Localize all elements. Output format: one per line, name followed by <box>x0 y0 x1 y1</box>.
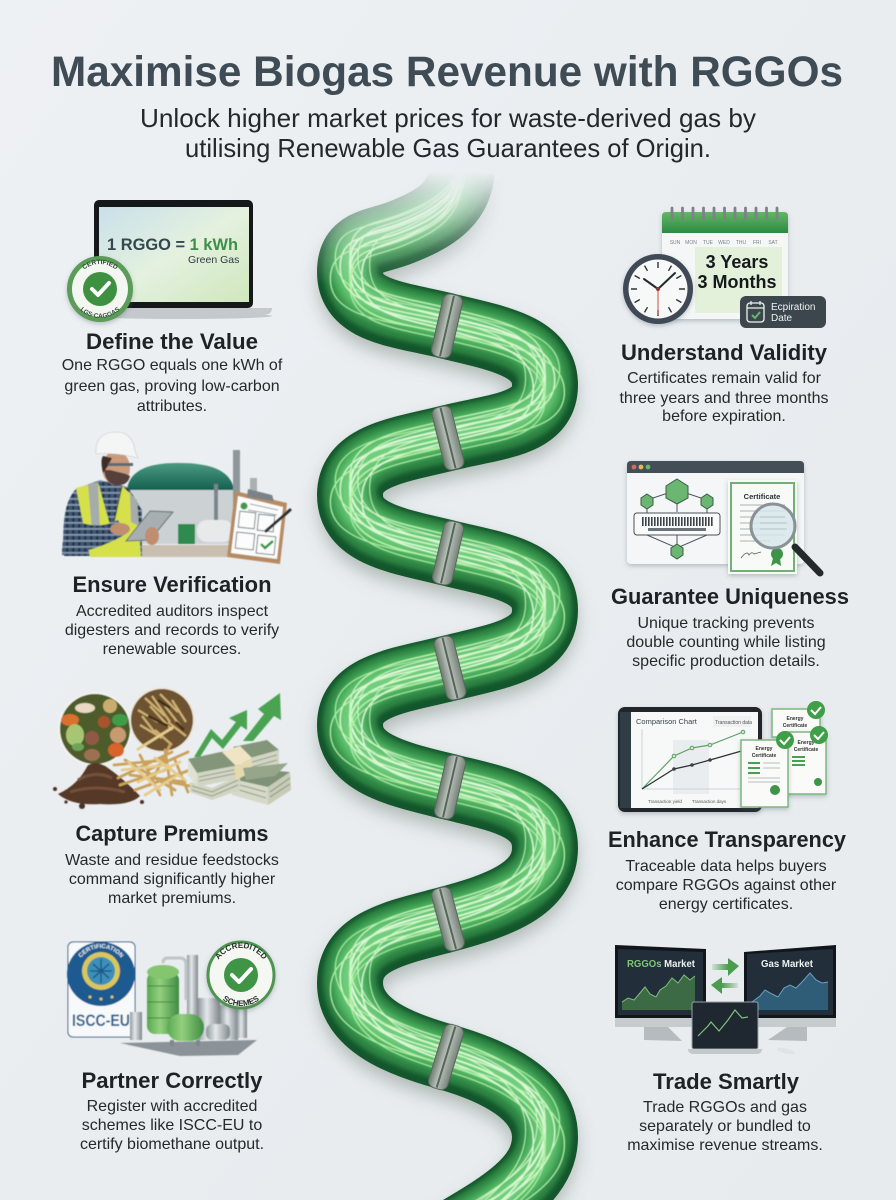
tablet comparison chart: Transaction yield <box>648 799 682 804</box>
text: capture premiums description <box>65 852 279 907</box>
certificate stack: Energy <box>798 740 815 746</box>
icon: certified badge: LGS·CAGGAS <box>80 306 120 318</box>
calendar: MON <box>685 240 697 246</box>
calendar: WED <box>718 240 730 246</box>
icon: market monitors with exchange arrows <box>615 945 836 1056</box>
straw pile <box>114 728 190 795</box>
text: ensure verification description: renewable sources. <box>103 641 241 658</box>
heading: Guarantee Uniqueness: Guarantee Uniqueness <box>611 584 849 609</box>
text: enhance transparency description: compare RGGOs against other <box>616 877 837 894</box>
text: define the value description: attributes. <box>137 398 207 415</box>
pipe clamp ring 5 <box>433 754 467 820</box>
icon: calendar with clock and expiration tag <box>623 208 826 328</box>
text: capture premiums description: Waste and residue feedstocks <box>65 852 279 869</box>
icon: inspector with digester and clipboard <box>62 432 290 564</box>
wall clock <box>623 254 693 324</box>
certificate stack: Certificate <box>752 753 776 759</box>
pipe clamp ring 1 <box>430 293 464 359</box>
text: capture premiums description: market premiums. <box>108 890 236 907</box>
text: understand validity description: before expiration. <box>662 408 786 425</box>
accredited schemes seal: SCHEMES <box>223 996 259 1006</box>
text: capture premiums description: command significantly higher <box>69 871 276 888</box>
tracking window <box>627 461 804 564</box>
rising green arrows <box>194 693 281 757</box>
calendar: TUE <box>703 240 714 246</box>
heading: Partner Correctly: Partner Correctly <box>82 1068 263 1093</box>
calendar: 3 Months <box>698 272 776 292</box>
gas market monitor: Gas Market <box>761 959 814 970</box>
text: enhance transparency description: Traceable data helps buyers <box>625 858 827 875</box>
ISCC-EU badge: ISCC-EU <box>72 1012 130 1030</box>
text: trade smartly description <box>627 1099 823 1154</box>
soil pile <box>53 763 144 809</box>
inspector figure <box>62 432 173 557</box>
text: partner correctly description: certify biomethane output. <box>80 1136 264 1153</box>
icon: ISCC-EU badge, plant and accredited seal <box>66 940 278 1056</box>
title: Maximise Biogas Revenue with RGGOs <box>51 48 843 96</box>
accredited schemes seal <box>204 940 278 1014</box>
pipe clamp ring 6 <box>430 886 466 952</box>
gas market monitor <box>744 945 836 1041</box>
icon: comparison chart tablet and certificates <box>618 701 828 812</box>
digester tank <box>120 450 257 557</box>
icon: laptop showing 1 RGGO = 1 kWh <box>64 200 272 326</box>
heading: Trade Smartly: Trade Smartly <box>653 1069 800 1094</box>
RGGOs market monitor <box>615 945 706 1041</box>
tablet comparison chart <box>618 707 762 812</box>
calendar: SAT <box>768 240 778 246</box>
text: enhance transparency description <box>616 858 837 913</box>
icon: feedstocks and cash with rising arrows <box>53 687 291 809</box>
clipboard checklist <box>227 489 290 564</box>
text: partner correctly description: schemes like ISCC-EU to <box>82 1117 262 1134</box>
pipe clamp ring 7 <box>427 1023 465 1091</box>
pipe clamp ring 2 <box>431 405 465 471</box>
subtitle: utilising Renewable Gas Guarantees of Origin. <box>185 133 711 163</box>
laptop chart <box>688 1002 795 1056</box>
calendar: FRI <box>753 240 761 246</box>
calendar: THU <box>736 240 747 246</box>
certificate stack: Certificate <box>794 747 818 753</box>
text: enhance transparency description: energy certificates. <box>659 896 793 913</box>
text: guarantee uniqueness description <box>626 615 826 670</box>
accredited schemes seal: ACCREDITED <box>216 942 266 960</box>
text: understand validity description: three years and three months <box>619 390 829 407</box>
subtitle: Unlock higher market prices for waste-derived gas by <box>140 103 756 133</box>
RGGOs market monitor: RGGOs Market <box>627 958 695 970</box>
text: ensure verification description: Accredited auditors inspect <box>76 603 269 620</box>
icon: certified badge <box>64 256 135 326</box>
expiration date tag: Date <box>771 313 793 324</box>
text: understand validity description: Certificates remain valid for <box>627 370 822 387</box>
calendar: 3 Years <box>706 252 768 272</box>
tablet comparison chart: Comparison Chart <box>636 717 698 726</box>
icon: certified badge: CERTIFIED <box>82 260 118 269</box>
icon: blockchain window and certificate under magnifier <box>627 461 820 574</box>
pipe clamp ring 4 <box>433 635 467 701</box>
ISCC-EU badge: CERTIFICATION <box>78 943 124 958</box>
exchange arrows <box>711 958 739 994</box>
heading: Enhance Transparency: Enhance Transparency <box>608 827 847 852</box>
calendar <box>662 208 788 319</box>
text: guarantee uniqueness description: Unique tracking prevents <box>638 615 814 632</box>
text: trade smartly description: Trade RGGOs and gas <box>643 1099 807 1116</box>
text: define the value description: green gas, proving low-carbon <box>64 378 280 395</box>
certificate stack: Energy <box>756 746 773 752</box>
text: partner correctly description <box>80 1098 264 1153</box>
text: guarantee uniqueness description: double counting while listing <box>626 634 826 651</box>
food waste circle <box>58 692 132 766</box>
icon: laptop showing 1 RGGO = 1 kWh: Green Gas <box>188 254 239 266</box>
text: partner correctly description: Register with accredited <box>87 1098 257 1115</box>
icon: laptop showing 1 RGGO = 1 kWh: 1 RGGO = 1 kWh <box>107 236 238 254</box>
text: ensure verification description: digesters and records to verify <box>65 622 279 639</box>
biomass circle <box>129 687 195 753</box>
certificate: Certificate <box>744 492 780 501</box>
heading: Ensure Verification: Ensure Verification <box>72 572 272 597</box>
certificate stack <box>741 701 828 807</box>
biomethane plant <box>120 955 257 1056</box>
expiration date tag <box>740 296 826 328</box>
central glowing biogas pipeline <box>330 147 564 1200</box>
certificate stack: Energy <box>787 716 804 722</box>
text: define the value description: One RGGO equals one kWh of <box>62 357 283 374</box>
ISCC-EU badge <box>66 940 136 1038</box>
text: trade smartly description: maximise revenue streams. <box>627 1137 823 1154</box>
stacks of banknotes <box>188 740 291 805</box>
tablet comparison chart: Transaction days <box>692 799 727 804</box>
text: understand validity description <box>619 370 829 425</box>
calendar: SUN <box>670 240 681 246</box>
pipe clamp ring 3 <box>431 520 465 586</box>
certificate <box>728 480 797 574</box>
text: guarantee uniqueness description: specific production details. <box>632 653 820 670</box>
magnifying glass <box>751 504 820 573</box>
text: ensure verification description <box>65 603 279 658</box>
text: define the value description <box>62 357 283 415</box>
text: trade smartly description: separately or bundled to <box>639 1118 811 1135</box>
tablet comparison chart: Transaction data <box>715 720 752 726</box>
heading: Define the Value: Define the Value <box>86 329 258 354</box>
certificate stack: Certificate <box>783 723 807 729</box>
subtitle <box>140 103 756 163</box>
expiration date tag: Ecpiration <box>771 302 815 313</box>
heading: Capture Premiums: Capture Premiums <box>76 821 268 846</box>
heading: Understand Validity: Understand Validity <box>621 340 828 365</box>
